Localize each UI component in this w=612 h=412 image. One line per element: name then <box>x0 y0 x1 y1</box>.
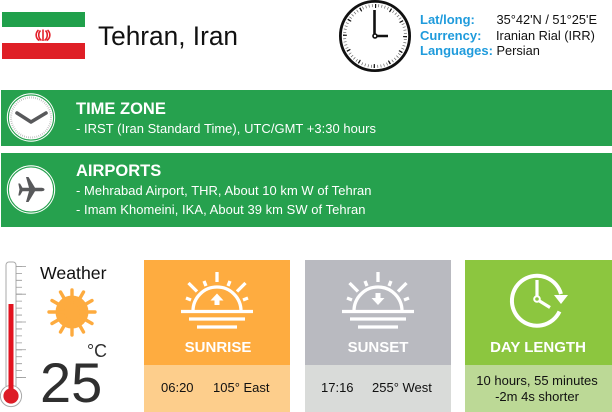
icon: sun <box>49 290 95 335</box>
panel: airports: - Mehrabad Airport, THR, About 10 km W of Tehran <box>76 183 372 198</box>
icon: flag of Iran <box>2 12 85 59</box>
panel: airports: - Imam Khomeini, IKA, About 39 km SW of Tehran <box>76 202 366 217</box>
icon: clock badge <box>7 93 55 142</box>
panel: sunrise <box>144 260 290 412</box>
location facts: 35°42'N / 51°25'E <box>496 12 597 27</box>
location facts: Languages: <box>420 43 493 58</box>
panel: sunset <box>305 260 451 412</box>
panel: day length: -2m 4s shorter <box>495 389 580 404</box>
panel: day length: 10 hours, 55 minutes <box>476 373 598 388</box>
panel: sunset: 255° West <box>372 380 432 395</box>
panel: sunset: SUNSET <box>348 339 408 356</box>
icon: sunrise <box>181 272 253 327</box>
icon: day length clock <box>512 276 568 326</box>
location facts: Iranian Rial (IRR) <box>496 28 595 43</box>
panel: sunset: 17:16 <box>321 380 354 395</box>
weather heading: Weather <box>40 263 107 283</box>
temperature: °C <box>87 340 107 361</box>
panel: time zone: TIME ZONE <box>76 100 166 118</box>
panel: time zone <box>1 90 612 146</box>
panel: day length: DAY LENGTH <box>490 339 586 356</box>
location facts: Currency: <box>420 28 481 43</box>
icon: wall clock <box>340 1 410 71</box>
icon: airplane badge <box>7 165 55 214</box>
location facts: Persian <box>496 43 540 58</box>
icon: thermometer <box>0 262 22 407</box>
panel: airports <box>1 153 612 227</box>
panel: sunrise: 06:20 <box>161 380 194 395</box>
icon: sunset <box>342 272 414 327</box>
location facts: Lat/long: <box>420 12 475 27</box>
panel: sunrise: SUNRISE <box>185 339 251 356</box>
panel: time zone: - IRST (Iran Standard Time), UTC/GMT +3:30 hours <box>76 121 376 136</box>
title: Tehran, Iran <box>98 21 238 51</box>
panel: sunrise: 105° East <box>213 380 270 395</box>
panel: day length <box>465 260 612 412</box>
location facts <box>420 12 597 58</box>
panel: airports: AIRPORTS <box>76 162 161 180</box>
